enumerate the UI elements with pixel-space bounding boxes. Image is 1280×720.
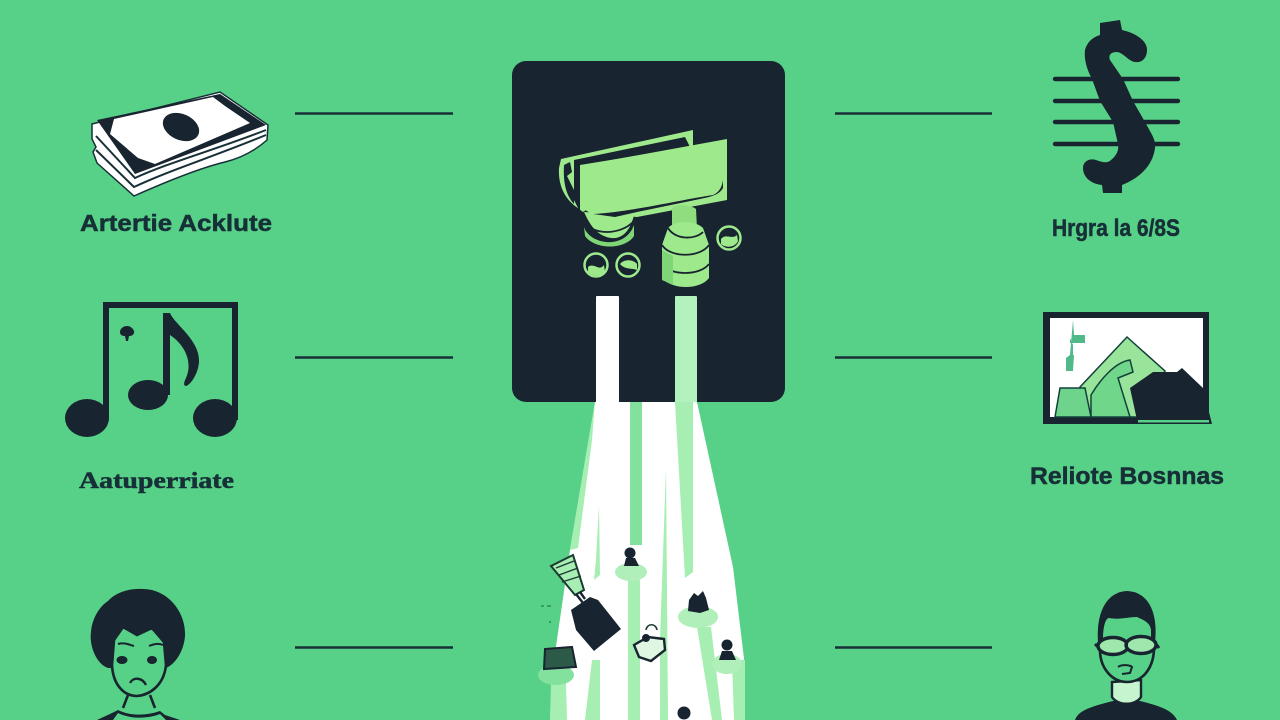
icon: music notes in frame bbox=[65, 302, 238, 437]
stream item: square token bbox=[544, 647, 576, 669]
connector lines, right bbox=[835, 114, 992, 648]
connector lines, left bbox=[295, 114, 453, 648]
stream item: small bag bbox=[688, 591, 709, 613]
icon: stack of banknotes bbox=[92, 92, 268, 196]
icon: framed mountain picture bbox=[1043, 312, 1212, 424]
label: mountain picture: Reliote Bosnnas bbox=[1030, 463, 1224, 490]
label: banknotes: Artertie Acklute bbox=[80, 210, 272, 236]
label: dollar: Hrgra la 6/8S bbox=[1052, 215, 1180, 242]
chute: pale green channel bbox=[675, 296, 697, 406]
light stream flowing down bbox=[538, 402, 745, 720]
icon: banknote press machine bbox=[559, 130, 740, 287]
label: music: Aatuperriate bbox=[79, 468, 234, 493]
icon: dollar sign with staff lines bbox=[1055, 20, 1178, 193]
stream item: small figure bbox=[719, 640, 736, 660]
stream item: price tag bbox=[541, 555, 621, 651]
stream item: small figure bbox=[624, 548, 639, 566]
central dark panel bbox=[512, 61, 785, 406]
stream item: bottom figure bbox=[678, 706, 690, 720]
stream item: padlock bbox=[634, 625, 665, 661]
chute: white channel bbox=[596, 296, 619, 406]
icon: person with afro bbox=[91, 589, 185, 720]
icon: person with glasses bbox=[1075, 591, 1177, 720]
